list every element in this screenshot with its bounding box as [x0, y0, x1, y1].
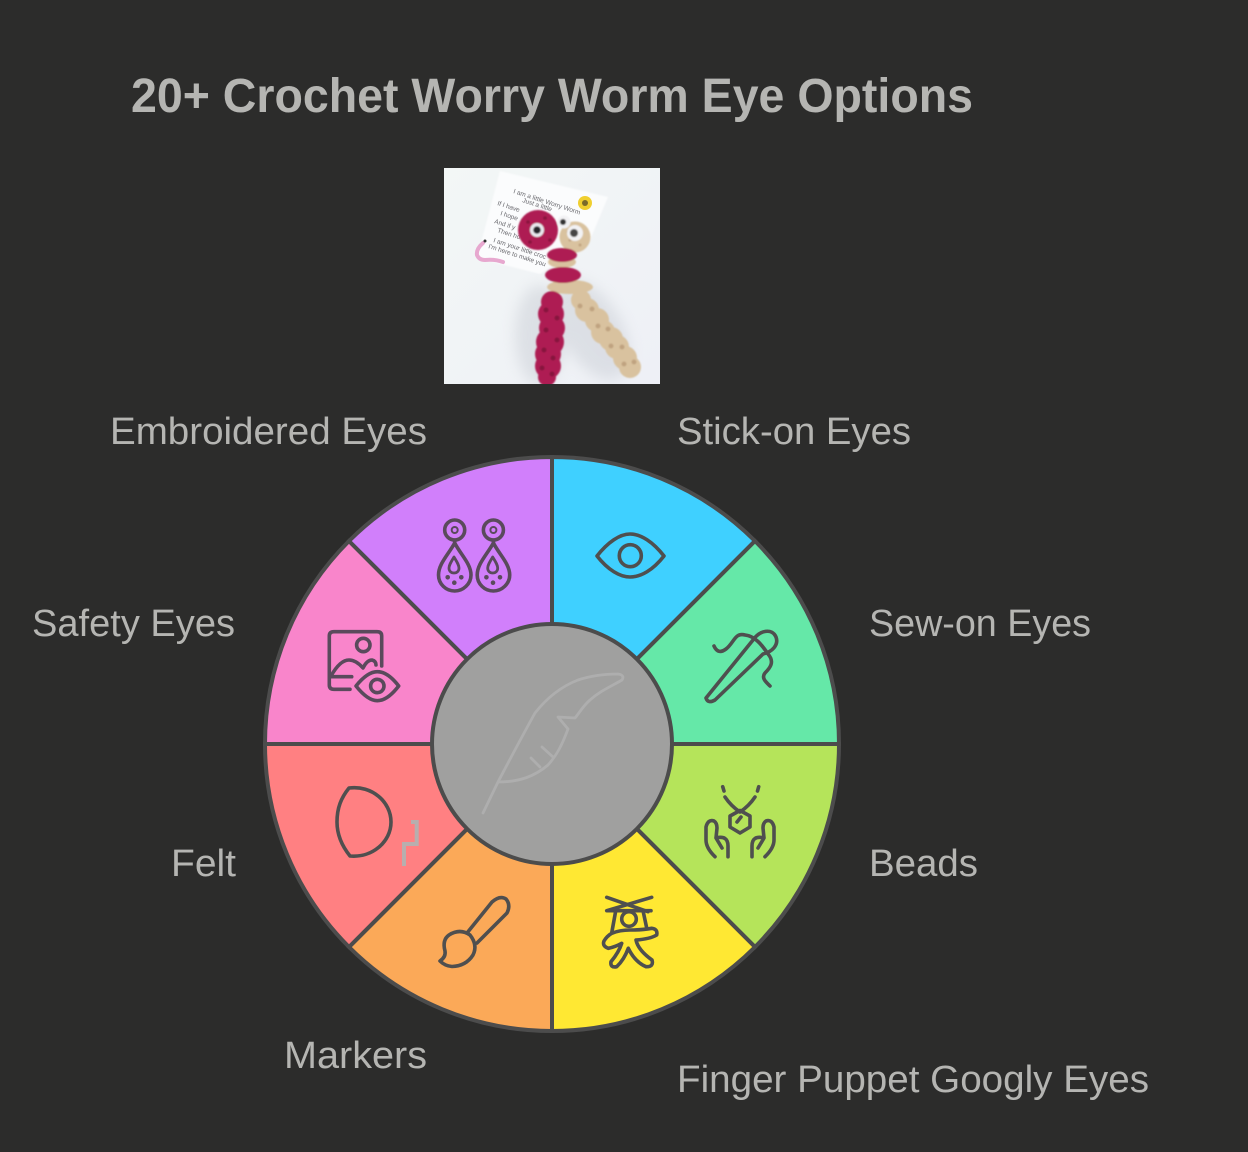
title: 20+ Crochet Worry Worm Eye Options	[131, 70, 973, 123]
icon: eye	[597, 534, 664, 577]
segment: embroidered eyes	[349, 457, 552, 744]
photo: crocheted worry worms: If I have	[496, 200, 521, 214]
photo: crocheted worry worms: I am your little croc	[492, 237, 548, 261]
photo: crocheted worry worms: And if y	[493, 218, 517, 232]
photo: crocheted worry worms: I am a little Worry Worm	[512, 188, 581, 217]
segment: finger puppet googly eyes	[552, 744, 755, 1031]
icon: finger puppet	[604, 897, 657, 967]
segment: sew-on eyes	[552, 541, 839, 744]
label: markers: Markers	[284, 1035, 427, 1077]
segment: markers	[349, 744, 552, 1031]
segment: felt	[265, 744, 552, 947]
segment: safety eyes	[265, 541, 552, 744]
label: felt: Felt	[171, 843, 236, 885]
photo: crocheted worry worms	[444, 168, 660, 393]
label: sew-on eyes: Sew-on Eyes	[869, 603, 1091, 645]
infographic canvas	[34, 77, 1148, 1100]
label: finger puppet googly eyes: Finger Puppet Googly Eyes	[677, 1059, 1149, 1101]
label: embroidered eyes: Embroidered Eyes	[110, 411, 427, 453]
label: safety eyes: Safety Eyes	[32, 603, 235, 645]
wheel	[265, 457, 839, 1031]
icon: feather	[483, 674, 623, 813]
photo: crocheted worry worms: Just a little	[521, 197, 553, 214]
photo: crocheted worry worms: I hope	[499, 210, 519, 223]
photo: crocheted worry worms: I'm here to make you	[487, 243, 547, 269]
icon: felt shape	[337, 788, 417, 866]
segment: beads	[552, 744, 839, 947]
icon: needle and thread	[706, 631, 777, 702]
center hub	[432, 624, 672, 864]
icon: paint brush	[440, 898, 509, 966]
icon: drop earrings	[438, 520, 510, 591]
icon: picture with eye	[329, 632, 399, 701]
label: stick-on eyes: Stick-on Eyes	[677, 411, 911, 453]
segment: stick-on eyes	[552, 457, 755, 744]
label: beads: Beads	[869, 843, 978, 885]
icon: necklace in hands	[706, 787, 774, 857]
photo: crocheted worry worms: Then ho	[496, 227, 522, 241]
